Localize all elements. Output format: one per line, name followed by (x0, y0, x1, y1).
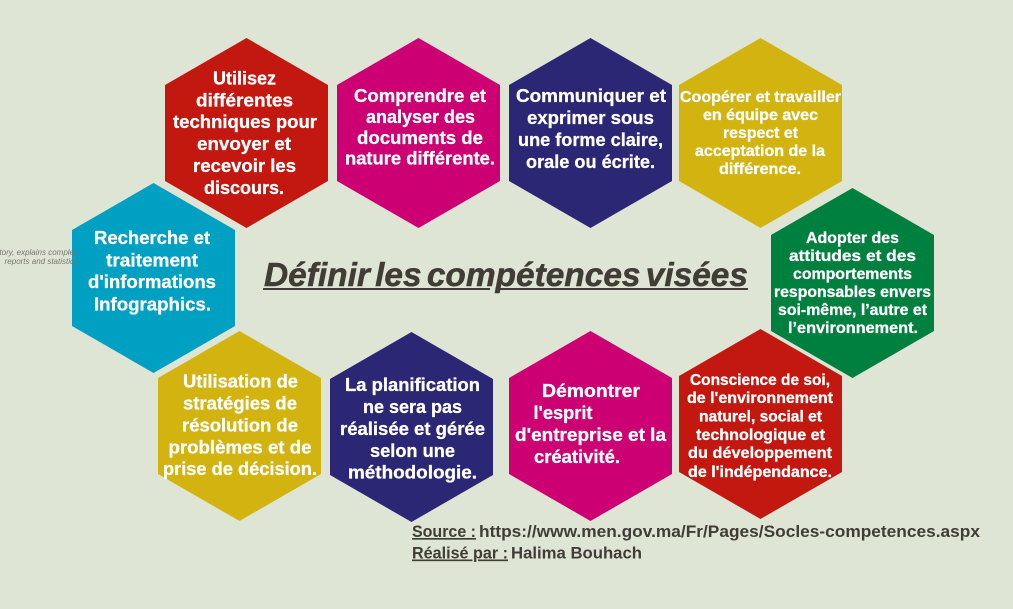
hexagon: Communiquer et exprimer: orale ou écrite. (526, 151, 655, 172)
hexagon: Communiquer et exprimer: exprimer sous (527, 107, 654, 128)
hexagon: Conscience de soi: de l'indépendance. (688, 464, 832, 481)
hexagon: Recherche et traitement (72, 183, 235, 373)
hexagon: Comprendre et analyser: analyser des (366, 106, 475, 127)
hexagon: Comprendre et analyser (337, 38, 500, 228)
hexagon: Utilisez différentes techniques: différentes (196, 90, 293, 110)
hexagon: Conscience de soi: naturel, social et (699, 408, 823, 426)
hexagon: La planification (330, 332, 493, 522)
hexagon: Démontrer l'esprit d'entreprise: Démontrer (542, 380, 640, 401)
author line: Halima Bouhach (511, 544, 642, 562)
hexagon: Démontrer l'esprit d'entreprise (509, 331, 672, 521)
hexagon: Adopter des attitudes: Adopter des (806, 230, 899, 247)
hexagon: Conscience de soi: du développement (688, 445, 833, 462)
hexagon: Conscience de soi (679, 329, 842, 519)
hexagon: Coopérer et travailler: en équipe avec (703, 107, 818, 124)
hexagon: Utilisation de stratégies: Utilisation de (183, 370, 298, 392)
hexagon: Coopérer et travailler: acceptation de la (695, 143, 825, 160)
hexagon: Communiquer et exprimer: une forme claire, (518, 129, 663, 150)
hexagon: Coopérer et travailler: différence. (719, 161, 801, 178)
hexagon: Utilisez différentes techniques (165, 38, 328, 228)
hexagon: Coopérer et travailler: respect et (723, 125, 799, 142)
hexagon: La planification: selon une (370, 440, 455, 461)
hexagon: Utilisez différentes techniques: envoyer et (197, 133, 291, 154)
hexagon: Conscience de soi: de l'environnement (687, 390, 834, 407)
author line: Réalisé par : (412, 544, 508, 562)
hexagon: Adopter des attitudes: responsables envers (774, 284, 931, 301)
hexagon: Utilisation de stratégies: problèmes et de (168, 436, 312, 458)
hexagon: Recherche et traitement: Infographics. (94, 294, 211, 314)
clipped background caption (0, 248, 79, 266)
hexagon: Utilisation de stratégies: prise de décision. (163, 458, 317, 479)
hexagon: Conscience de soi: technologique et (696, 427, 826, 444)
hexagon: Recherche et traitement: Recherche et (94, 227, 210, 248)
hexagon: La planification: ne sera pas (363, 396, 462, 417)
hexagon: Utilisation de stratégies: stratégies de (183, 392, 297, 414)
hexagon: Coopérer et travailler (679, 38, 842, 228)
author line (412, 544, 642, 562)
hexagon: Utilisez différentes techniques: discours. (204, 177, 284, 198)
hexagon: Communiquer et exprimer (509, 38, 672, 228)
hexagon: Utilisation de stratégies: résolution de (182, 414, 298, 436)
hexagon: Conscience de soi: Conscience de soi, (690, 372, 830, 389)
hexagon: Comprendre et analyser: Comprendre et (354, 85, 486, 106)
hexagon: Démontrer l'esprit d'entreprise: l'esprit (534, 402, 592, 423)
hexagon: La planification: méthodologie. (348, 462, 477, 482)
hexagon: Utilisez différentes techniques: recevoir les (193, 155, 296, 176)
hexagon: Adopter des attitudes (771, 188, 934, 378)
source line: Source : (412, 523, 476, 541)
hexagon: Utilisez différentes techniques: Utilisez (213, 68, 276, 88)
main title: Définir les compétences visées (264, 256, 748, 293)
hexagon: Utilisez différentes techniques: techniques pour (173, 111, 317, 132)
hexagon: Adopter des attitudes: l’environnement. (788, 320, 918, 337)
hexagon: Recherche et traitement: d'informations (88, 271, 216, 292)
hexagon: Adopter des attitudes: attitudes et des (789, 248, 916, 265)
clipped background caption: reports and statistics (5, 257, 78, 266)
hexagon: Démontrer l'esprit d'entreprise: créativité. (534, 446, 620, 467)
hexagon: Recherche et traitement: traitement (106, 250, 198, 270)
hexagon: Coopérer et travailler: Coopérer et travailler (680, 89, 841, 106)
hexagon: Adopter des attitudes: soi-même, l’autre et (778, 302, 928, 319)
clipped background caption: tory, explains complex (0, 248, 79, 257)
hexagon: Comprendre et analyser: nature différente. (345, 148, 495, 168)
hexagon: Comprendre et analyser: documents de (357, 127, 483, 148)
hexagon: La planification: La planification (345, 374, 480, 395)
hexagon: Démontrer l'esprit d'entreprise: d'entreprise et la (515, 424, 667, 445)
hexagon: Adopter des attitudes: comportements (793, 266, 912, 283)
hexagon: Utilisation de stratégies (158, 331, 321, 521)
hexagon: Communiquer et exprimer: Communiquer et (516, 85, 666, 106)
source line: https://www.men.gov.ma/Fr/Pages/Socles-competences.aspx (479, 523, 981, 541)
hexagon: La planification: réalisée et gérée (340, 418, 485, 439)
